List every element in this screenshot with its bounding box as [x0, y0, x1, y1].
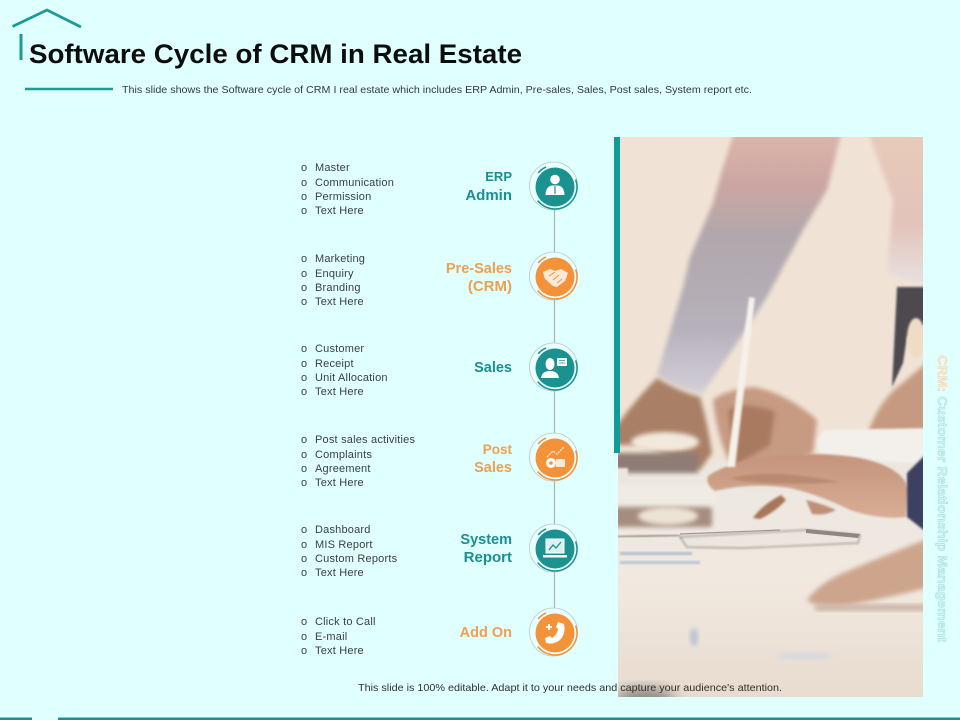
bullet list: Post Sales: o — [301, 434, 307, 446]
bullet list: Post Sales: o — [301, 477, 307, 489]
label: System Report — [460, 532, 512, 566]
bullet list: System Report: Custom Reports — [315, 553, 398, 565]
bullet list: Post Sales: Complaints — [315, 449, 372, 461]
bullet list: Pre-Sales: o — [301, 268, 307, 280]
bullet list: Post Sales: o — [301, 449, 307, 461]
photo accent bar — [614, 137, 620, 453]
bullet list: Pre-Sales: Enquiry — [315, 268, 354, 280]
label: Add On: Add On — [460, 625, 512, 641]
bullet list: Pre-Sales: Text Here — [315, 296, 364, 308]
bullet list: Pre-Sales: o — [301, 282, 307, 294]
label: ERP Admin — [465, 169, 512, 204]
bullet list: Pre-Sales: o — [301, 296, 307, 308]
bottom rule — [0, 718, 960, 720]
bullet list: Post Sales: Text Here — [315, 477, 364, 489]
bullet list: Post Sales: Post sales activities — [315, 434, 415, 446]
bullet list: Pre-Sales: Branding — [315, 282, 361, 294]
bullet list: Add On: o — [301, 645, 307, 657]
step: Sales — [301, 340, 583, 398]
header accent line — [25, 88, 113, 90]
bullet list: Sales: o — [301, 343, 307, 355]
bullet list: ERP Admin: Communication — [315, 177, 394, 189]
label: Post Sales: Sales — [474, 460, 512, 476]
bullet list: Add On: E-mail — [315, 631, 347, 643]
icon: agent with speech bubble — [527, 340, 583, 396]
bullet list: Sales: o — [301, 386, 307, 398]
icon: person with tie — [527, 159, 583, 215]
label: Post Sales — [474, 442, 512, 476]
subtitle: This slide shows the Software cycle of CRM I real estate which includes ERP Admin, Pre-sales, Sales, Post sales, System report etc. — [122, 84, 752, 96]
bullet list: Sales: o — [301, 372, 307, 384]
bullet list: Sales: Receipt — [315, 358, 354, 370]
bullet list: System Report: o — [301, 553, 307, 565]
bullet list: System Report: o — [301, 539, 307, 551]
bullet list: ERP Admin: o — [301, 205, 307, 217]
bullet list: Add On: Click to Call — [315, 616, 376, 628]
step: System Report — [301, 521, 583, 579]
icon: phone with plus — [527, 605, 583, 661]
bullet list: Add On: o — [301, 631, 307, 643]
bullet list: Add On: o — [301, 616, 307, 628]
vertical connector line — [554, 208, 556, 612]
bullet list: System Report: o — [301, 567, 307, 579]
bullet list: System Report: MIS Report — [315, 539, 373, 551]
bullet list: Post Sales: o — [301, 463, 307, 475]
bullet list: ERP Admin: Permission — [315, 191, 371, 203]
icon: laptop with chart — [527, 521, 583, 577]
label: ERP Admin: Admin — [465, 187, 512, 204]
label: ERP Admin: ERP — [485, 169, 512, 184]
label: Sales: Sales — [474, 360, 512, 376]
photo: hands at a meeting table — [612, 130, 930, 712]
label: System Report: Report — [464, 549, 512, 566]
bullet list: System Report: Text Here — [315, 567, 364, 579]
label: Post Sales: Post — [483, 442, 512, 457]
bullet list: ERP Admin: o — [301, 177, 307, 189]
bullet list: System Report: o — [301, 524, 307, 536]
step: Post Sales — [301, 430, 583, 489]
bullet list: ERP Admin: o — [301, 162, 307, 174]
bullet list: Pre-Sales: Marketing — [315, 253, 365, 265]
step: Add On — [301, 605, 583, 661]
label: Pre-Sales (CRM): Pre-Sales — [446, 261, 512, 277]
step: Pre-Sales (CRM) — [301, 249, 583, 308]
icon: handshake — [527, 249, 583, 305]
footer note: This slide is 100% editable. Adapt it to your needs and capture your audience's attention. — [358, 682, 782, 694]
bullet list: Sales: Unit Allocation — [315, 372, 388, 384]
bullet list: Add On: Text Here — [315, 645, 364, 657]
bullet list: Sales: Customer — [315, 343, 364, 355]
title: Software Cycle of CRM in Real Estate — [29, 39, 522, 69]
bullet list: Post Sales: Agreement — [315, 463, 371, 475]
bullet list: Pre-Sales: o — [301, 253, 307, 265]
bullet list: ERP Admin: Text Here — [315, 205, 364, 217]
step: ERP Admin — [301, 159, 583, 217]
bullet list: ERP Admin: Master — [315, 162, 350, 174]
bullet list: Sales: Text Here — [315, 386, 364, 398]
header house icon — [12, 10, 81, 60]
bullet list: Sales: o — [301, 358, 307, 370]
label: System Report: System — [460, 532, 512, 548]
icon: growth chart with money — [527, 430, 583, 486]
bullet list: ERP Admin: o — [301, 191, 307, 203]
label: Pre-Sales (CRM): (CRM) — [468, 278, 512, 295]
label: Pre-Sales (CRM) — [446, 261, 512, 295]
bullet list: System Report: Dashboard — [315, 524, 371, 536]
vertical caption: CRM: Customer Relationship Management — [935, 355, 949, 643]
